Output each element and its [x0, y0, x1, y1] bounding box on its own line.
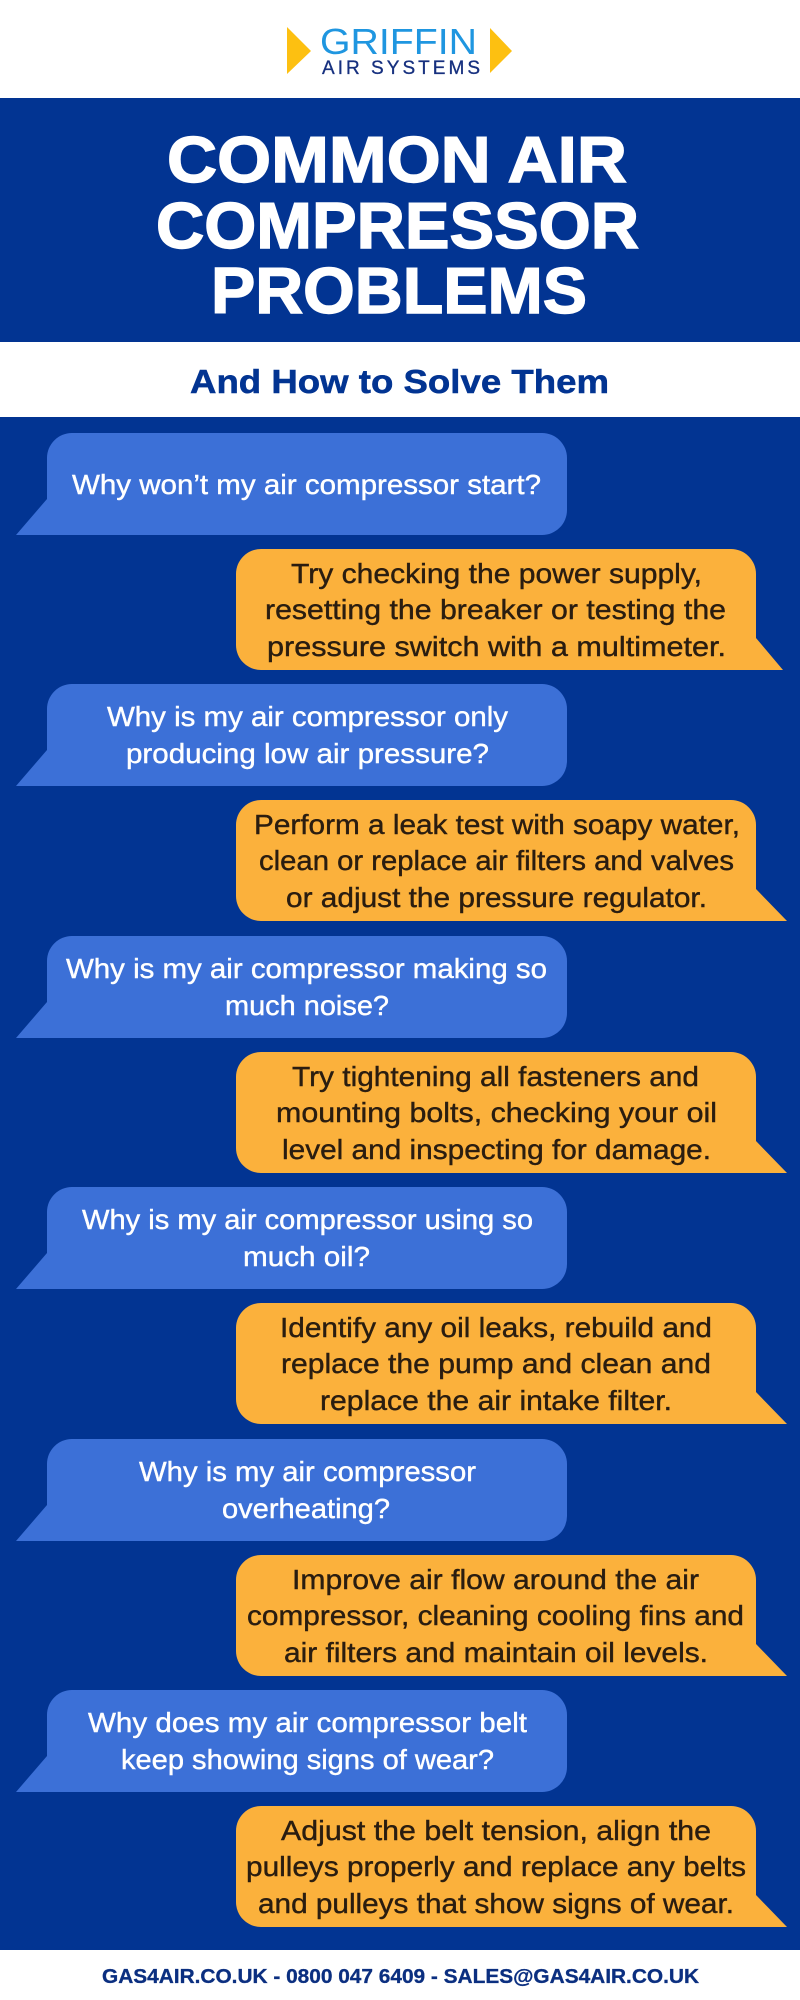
question bubble 6: [16, 1690, 567, 1792]
icon: left yellow arrow: [287, 27, 311, 74]
title: [156, 123, 639, 327]
title: COMPRESSOR: [156, 189, 639, 262]
answer bubble 4: Identify any oil leaks, rebuild and: [280, 1312, 712, 1343]
question bubble 5: overheating?: [222, 1493, 390, 1524]
question bubble 4: much oil?: [243, 1241, 370, 1272]
question bubble 2: Why is my air compressor only: [107, 701, 508, 732]
question bubble 3: Why is my air compressor making so: [66, 953, 547, 984]
question bubble 2: [16, 684, 567, 786]
answer bubble 6: [236, 1806, 787, 1927]
question bubble 6: keep showing signs of wear?: [121, 1744, 494, 1775]
question bubble 5: [16, 1439, 567, 1541]
footer contact line: GAS4AIR.CO.UK - 0800 047 6409 - SALES@GAS4AIR.CO.UK: [102, 1966, 700, 1988]
title background: [0, 98, 800, 342]
question bubble 4: Why is my air compressor using so: [82, 1204, 533, 1235]
answer bubble 5: compressor, cleaning cooling fins and: [247, 1600, 744, 1631]
answer bubble 4: replace the air intake filter.: [320, 1385, 672, 1416]
question bubble 4: [16, 1187, 567, 1289]
panel: chat section: [0, 417, 800, 1950]
logo wordmark: GRIFFIN: [320, 21, 477, 62]
subtitle: And How to Solve Them: [190, 363, 609, 400]
logo tagline: AIR SYSTEMS: [322, 58, 480, 79]
question bubble 6: Why does my air compressor belt: [88, 1707, 527, 1738]
answer bubble 1: Try checking the power supply,: [291, 558, 702, 589]
answer bubble 4: replace the pump and clean and: [281, 1348, 711, 1379]
answer bubble 1: [236, 549, 783, 670]
question bubble 1: Why won’t my air compressor start?: [72, 469, 541, 500]
answer bubble 3: level and inspecting for damage.: [282, 1134, 711, 1165]
answer bubble 1: pressure switch with a multimeter.: [267, 631, 726, 662]
answer bubble 2: Perform a leak test with soapy water,: [254, 809, 740, 840]
question bubble 2: producing low air pressure?: [126, 738, 489, 769]
question bubble 1: [16, 433, 567, 535]
answer bubble 3: mounting bolts, checking your oil: [276, 1097, 717, 1128]
question bubble 5: Why is my air compressor: [139, 1456, 476, 1487]
title: PROBLEMS: [211, 254, 587, 327]
question bubble 3: much noise?: [225, 990, 389, 1021]
logo: Griffin Air Systems: [287, 21, 512, 79]
answer bubble 5: air filters and maintain oil levels.: [284, 1637, 708, 1668]
title: COMMON AIR: [167, 123, 627, 196]
answer bubble 5: [236, 1555, 787, 1676]
answer bubble 3: [236, 1052, 787, 1173]
answer bubble 2: [236, 800, 787, 921]
answer bubble 5: Improve air flow around the air: [292, 1564, 699, 1595]
answer bubble 1: resetting the breaker or testing the: [265, 594, 726, 625]
answer bubble 2: clean or replace air filters and valves: [259, 845, 734, 876]
question bubble 3: [16, 936, 567, 1038]
answer bubble 3: Try tightening all fasteners and: [292, 1061, 699, 1092]
answer bubble 2: or adjust the pressure regulator.: [286, 882, 707, 913]
answer bubble 4: [236, 1303, 787, 1424]
chat background: [0, 417, 800, 1950]
answer bubble 6: Adjust the belt tension, align the: [281, 1815, 711, 1846]
title banner: [0, 98, 800, 342]
icon: right yellow arrow: [490, 28, 512, 73]
answer bubble 6: pulleys properly and replace any belts: [246, 1851, 746, 1882]
answer bubble 6: and pulleys that show signs of wear.: [258, 1888, 734, 1919]
